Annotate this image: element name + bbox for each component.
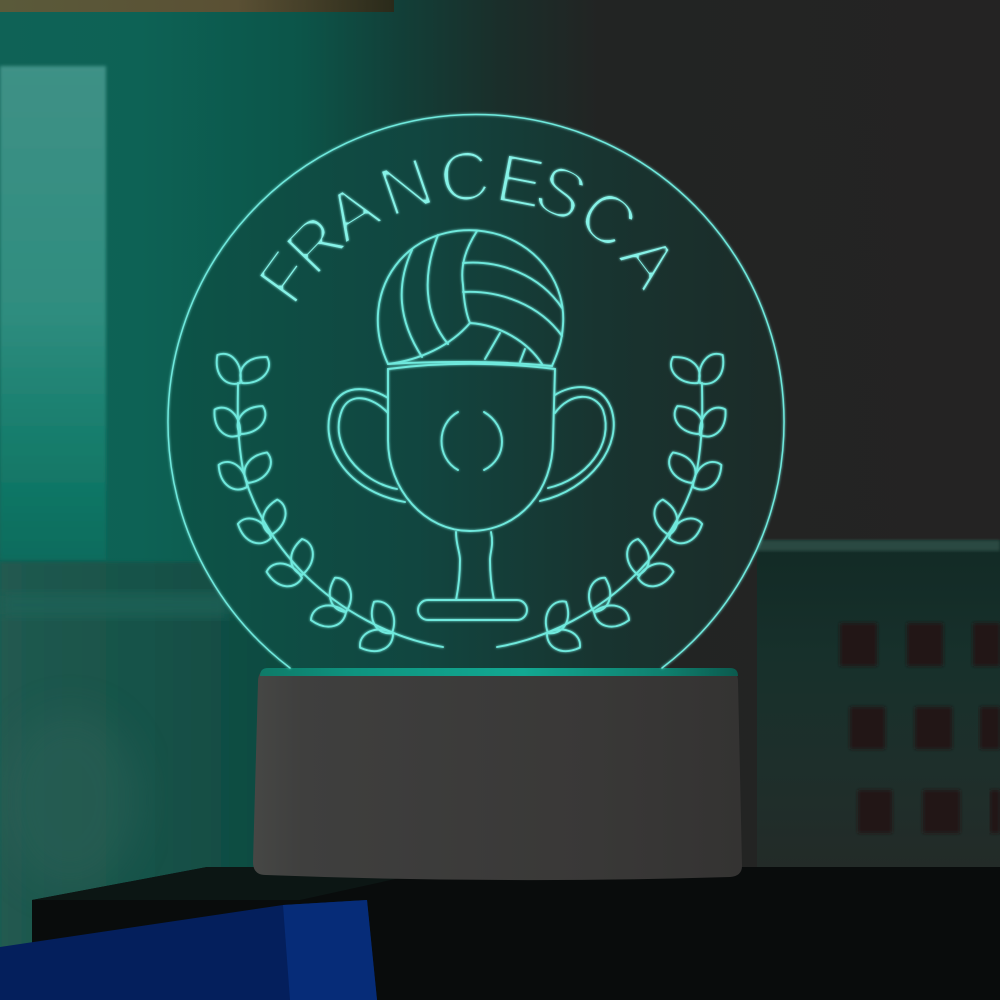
trophy stem and foot bbox=[418, 532, 527, 620]
volleyball bbox=[378, 230, 563, 366]
acrylic disc outline bbox=[168, 115, 784, 668]
trophy cup bbox=[388, 362, 555, 531]
right handle bbox=[540, 387, 614, 501]
lamp base bbox=[253, 668, 742, 880]
blue object bbox=[0, 900, 377, 1000]
window light panel bbox=[0, 66, 106, 560]
wooden shelf edge bbox=[0, 0, 394, 12]
mottled light patch bbox=[0, 710, 140, 890]
left laurel bbox=[207, 348, 443, 658]
dark table bbox=[32, 867, 1000, 1000]
storage basket bbox=[757, 540, 1000, 868]
light horizontal band bbox=[0, 592, 230, 618]
acrylic disc tint bbox=[168, 115, 784, 668]
name: FRANCESCA: FRANCESCA bbox=[242, 135, 695, 318]
left handle bbox=[328, 389, 405, 502]
lower wall band bbox=[0, 562, 430, 1000]
right laurel bbox=[497, 348, 733, 658]
lamp engraving bbox=[168, 115, 784, 668]
